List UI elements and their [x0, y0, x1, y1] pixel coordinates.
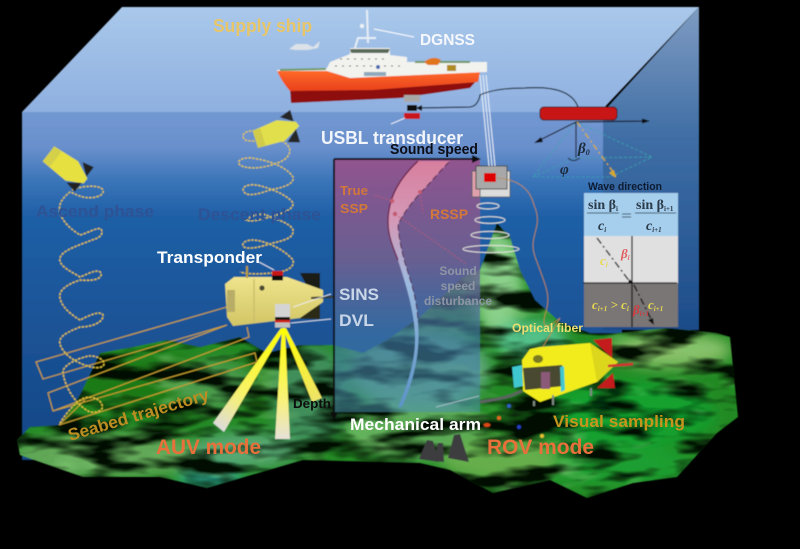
water column	[22, 112, 622, 460]
mechanical arm pointer	[436, 396, 479, 407]
sampled objects	[484, 404, 544, 438]
AUV main vehicle	[225, 262, 333, 328]
cable to ship	[480, 75, 495, 166]
rock outcrops	[419, 434, 469, 462]
label: Transponder: Transponder	[157, 248, 262, 267]
Snell equation: c	[646, 219, 652, 234]
ROV vehicle	[480, 338, 633, 406]
Snell equation: i	[616, 205, 618, 213]
label: Visual sampling: Visual sampling	[553, 412, 685, 431]
sound speed sensor	[472, 166, 510, 197]
label: DVL: DVL	[339, 311, 374, 330]
refraction labels: c	[592, 297, 598, 312]
formula and labels	[36, 16, 685, 459]
label: Sound speed disturbance: disturbance	[424, 294, 492, 308]
USBL transducer	[391, 95, 420, 124]
refraction labels	[592, 246, 663, 318]
label: AUV mode: AUV mode	[156, 436, 261, 459]
descent helix path	[239, 131, 293, 274]
RSSP band	[388, 161, 450, 407]
axes	[334, 159, 476, 414]
refraction labels: i+1	[598, 305, 607, 313]
AUV sonar beams	[213, 328, 322, 439]
label: DGNSS: DGNSS	[420, 32, 475, 49]
Snell equation: i+1	[664, 205, 674, 213]
refraction labels: > c	[607, 297, 627, 312]
angle labels: β	[578, 141, 586, 157]
terrain light ridges	[50, 261, 735, 492]
USBL cable	[419, 88, 578, 108]
label: USBL transducer: USBL transducer	[321, 128, 463, 148]
label: Ascend phase: Ascend phase	[36, 203, 154, 221]
label: RSSP: RSSP	[430, 207, 468, 222]
descending AUV	[250, 109, 304, 155]
optical fiber cable	[497, 178, 560, 350]
label: SSP: SSP	[340, 201, 368, 216]
formula and labels: φ	[560, 162, 569, 178]
Snell equation: c	[598, 219, 604, 234]
DVL unit	[275, 304, 290, 328]
label: Supply ship: Supply ship	[213, 16, 312, 36]
DGNSS pointer	[374, 29, 414, 37]
refraction labels: i	[606, 261, 608, 269]
transponder unit	[272, 271, 283, 280]
Snell's law panel	[583, 193, 678, 327]
label: Mechanical arm: Mechanical arm	[350, 415, 481, 434]
label: Sound speed disturbance: Sound	[439, 264, 477, 278]
refraction labels: i+1	[654, 305, 663, 313]
Snell equation	[588, 198, 674, 234]
ascending AUV	[40, 140, 95, 193]
Snell equation: i	[604, 226, 606, 234]
ascend helix path	[59, 186, 104, 423]
helicopter	[289, 41, 320, 50]
side wall	[603, 7, 699, 330]
seabed terrain	[0, 215, 760, 505]
label: ROV mode: ROV mode	[487, 436, 594, 459]
terrain shadows	[0, 215, 760, 505]
sound speed profile panel	[330, 155, 481, 420]
sound ripple rings	[463, 203, 519, 253]
refraction labels: i	[628, 254, 630, 262]
label: Depth: Depth	[293, 397, 331, 411]
label: True: True	[340, 183, 368, 198]
refraction labels: β	[633, 302, 640, 317]
label: SINS: SINS	[339, 285, 379, 304]
refraction labels: i+1	[640, 310, 649, 318]
label: Sound speed disturbance: speed	[441, 279, 475, 293]
refraction labels: c	[648, 297, 654, 312]
positioning array	[533, 107, 652, 178]
refraction labels: β	[621, 246, 628, 261]
Snell equation: i+1	[652, 226, 662, 234]
label: Wave direction: Wave direction	[588, 181, 662, 193]
ray fan	[533, 122, 652, 177]
angle labels: 0	[586, 148, 590, 157]
label: Seabed trajectory: Seabed trajectory	[66, 385, 212, 445]
label: Sound speed: Sound speed	[390, 142, 478, 158]
label: Optical fiber: Optical fiber	[512, 321, 583, 335]
supply ship	[277, 10, 487, 103]
Snell equation: sin β	[636, 198, 664, 213]
refraction labels: c	[600, 253, 606, 268]
SSP pointers	[375, 192, 465, 263]
label: Sound speed disturbance	[424, 264, 492, 308]
sea surface	[22, 7, 699, 112]
label: Descent phase: Descent phase	[198, 206, 321, 224]
refraction labels: i	[627, 305, 629, 313]
seabed trajectory path	[36, 307, 257, 425]
Snell equation: sin β	[588, 198, 616, 213]
